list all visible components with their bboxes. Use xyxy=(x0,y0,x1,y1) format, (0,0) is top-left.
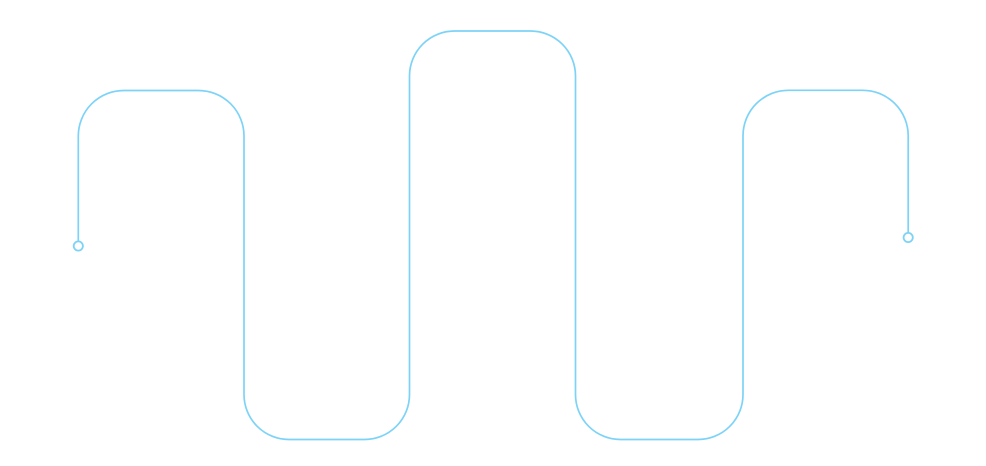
start node xyxy=(74,241,83,251)
end node xyxy=(904,233,913,242)
serpentine line xyxy=(78,31,908,440)
